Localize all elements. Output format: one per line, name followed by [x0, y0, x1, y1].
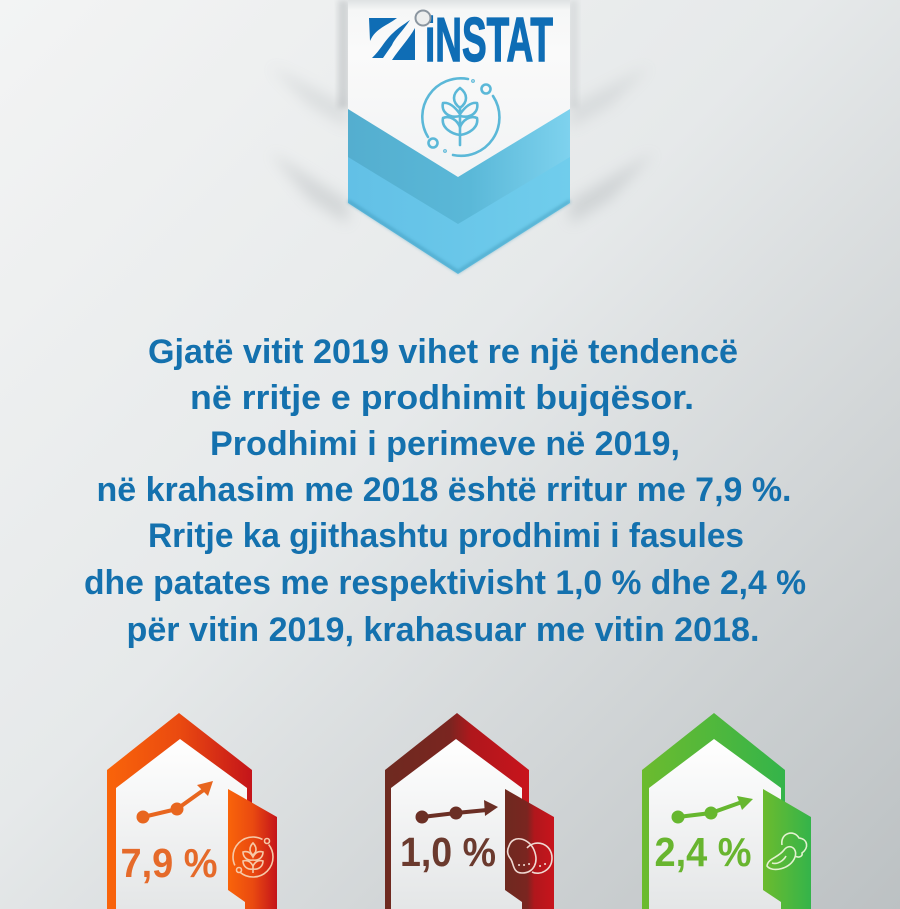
- body text paragraph: dhe patates me respektivisht 1,0 % dhe 2,4 %: [84, 564, 806, 602]
- body text paragraph: në rritje e prodhimit bujqësor.: [190, 379, 694, 417]
- banner: chevron tip shade: [348, 201, 570, 272]
- body text paragraph: Rritje ka gjithashtu prodhimi i fasules: [148, 517, 744, 555]
- ribbon: [505, 789, 554, 909]
- banner: lower light blue chevron: [348, 150, 570, 274]
- body text paragraph: [84, 333, 806, 649]
- banner: white panel: [348, 0, 570, 177]
- card inner panel: [116, 739, 247, 909]
- banner ribbon: [348, 0, 570, 274]
- card: vegetables 7,9 %: [107, 713, 277, 909]
- card inner panel: [391, 739, 522, 909]
- logo: INSTAT: [369, 6, 553, 75]
- body text paragraph: Gjatë vitit 2019 vihet re një tendencë: [148, 333, 738, 371]
- card outline: [107, 713, 252, 909]
- body text paragraph: në krahasim me 2018 është rritur me 7,9 %.: [96, 471, 792, 509]
- ribbon: [228, 789, 277, 909]
- trend arrow: [418, 800, 498, 822]
- card outline: [385, 713, 529, 909]
- body text paragraph: për vitin 2019, krahasuar me vitin 2018.: [126, 611, 760, 649]
- value: 7,9 %: [120, 840, 218, 886]
- value: 1,0 %: [400, 829, 496, 875]
- card outline: [642, 713, 785, 909]
- card: potatoes 2,4 %: [642, 713, 811, 909]
- card: beans 1,0 %: [385, 713, 554, 909]
- body text paragraph: Prodhimi i perimeve në 2019,: [210, 425, 680, 463]
- chevron shadows behind banner: [270, 0, 655, 224]
- icon: wheat: [233, 837, 273, 877]
- icon: potatoes: [508, 839, 552, 873]
- card inner panel: [649, 739, 781, 909]
- ribbon: [763, 789, 811, 909]
- icon: wheat in circle: [422, 78, 499, 156]
- value: 2,4 %: [654, 829, 752, 875]
- icon: beans: [767, 833, 807, 869]
- trend arrow: [674, 796, 753, 822]
- logo: INSTAT: iNSTAT: [425, 6, 553, 75]
- banner: darker blue chevron: [348, 108, 570, 224]
- trend arrow: [138, 781, 213, 822]
